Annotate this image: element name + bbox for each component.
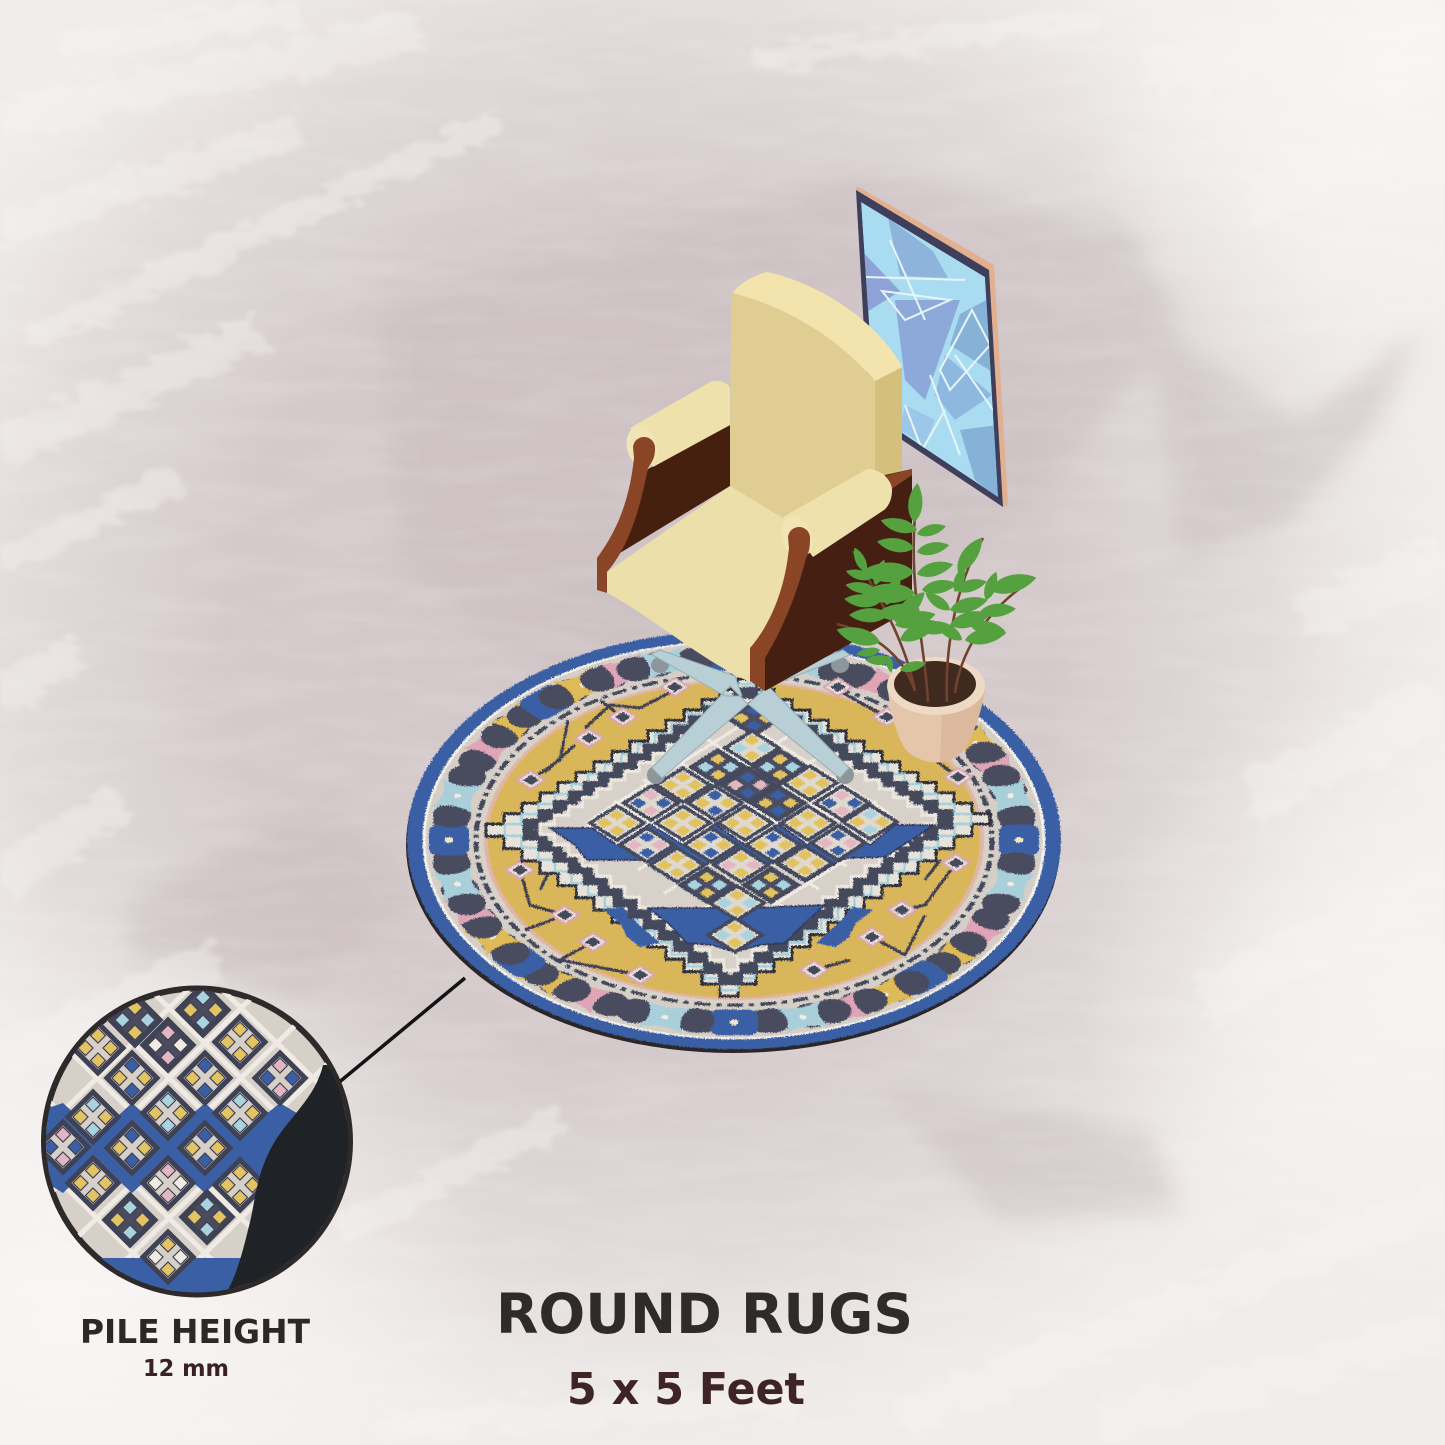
- potted plant: [834, 483, 1039, 762]
- lower blue band: [101, 1258, 240, 1292]
- swivel chair base: [647, 650, 854, 784]
- label: pile height: PILE HEIGHT: [80, 1312, 310, 1351]
- magnified diamond cells: [38, 985, 305, 1282]
- lower blue wings of the band: [603, 907, 873, 947]
- wall picture with blue shards: [856, 186, 1008, 507]
- chair back front face: [730, 291, 875, 540]
- plant soil: [894, 661, 976, 707]
- label: 12 mm: 12 mm: [143, 1356, 229, 1382]
- lattice lines in the field: [585, 696, 900, 958]
- right brown panel: [762, 469, 912, 691]
- right arm roll: [783, 469, 892, 557]
- chair back top face: [733, 272, 902, 381]
- right brown scroll and front post: [750, 527, 810, 691]
- yellow field vines and flowers: [506, 678, 972, 984]
- armchair: [597, 272, 912, 691]
- subtitle: size: 5 x 5 Feet: [567, 1364, 805, 1415]
- picture peach edge: [856, 186, 1008, 507]
- black rug backing: [228, 1065, 348, 1289]
- lattice of diamond cells: [590, 701, 897, 952]
- seat cushion: [607, 486, 788, 682]
- round rug: [407, 631, 1061, 1049]
- plant pot rim: [887, 657, 985, 715]
- plant pot body: [888, 688, 985, 762]
- left arm roll: [630, 381, 730, 467]
- blue zigzag band: [42, 1103, 300, 1193]
- picture glass: [861, 202, 1000, 500]
- chair back side face: [875, 367, 902, 490]
- chair legs: [651, 650, 850, 778]
- magnified rug detail circle: [38, 985, 355, 1300]
- stepped diamond medallion: [486, 679, 990, 996]
- left brown panel: [615, 425, 730, 556]
- left brown scroll and front post: [597, 437, 655, 593]
- rug round border: [407, 631, 1061, 1049]
- chair casters: [647, 657, 854, 784]
- rug shadow: [406, 637, 1060, 1053]
- blue medallion bands: [550, 824, 934, 952]
- title: round rugs: ROUND RUGS: [496, 1282, 913, 1346]
- callout line: [337, 978, 465, 1084]
- magnifier weave contents: [38, 985, 355, 1300]
- plant stems: [837, 486, 1032, 702]
- plant leaves: [834, 483, 1039, 675]
- picture dark frame: [856, 190, 1003, 507]
